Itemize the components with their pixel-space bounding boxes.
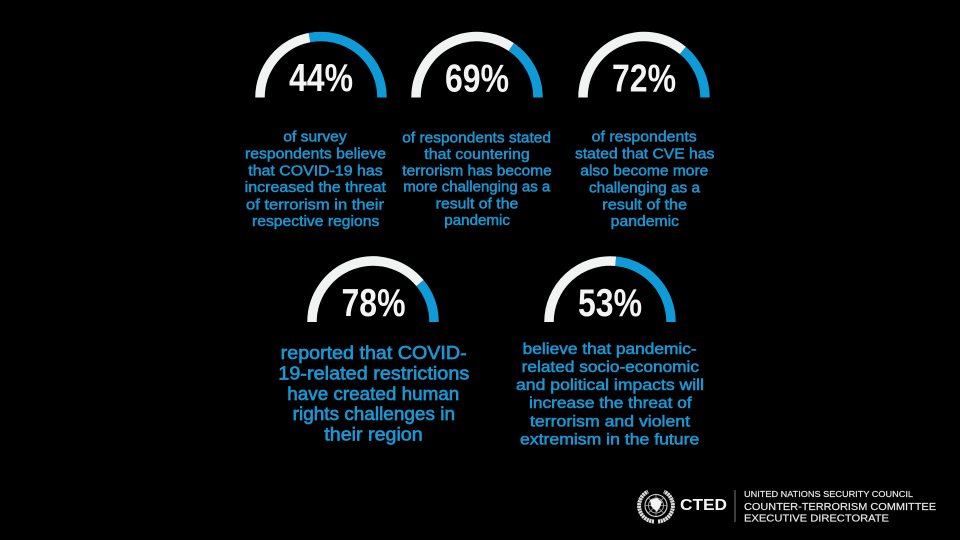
description: 78%: 19-related restrictions <box>278 363 469 383</box>
gauge: 53% <box>549 261 671 322</box>
description: 44%: respective regions <box>252 214 379 230</box>
description: 72%: result of the <box>602 197 687 213</box>
description: 69%: terrorism has become <box>402 163 552 179</box>
value: 53%: 53% <box>578 282 642 325</box>
wordmark: CTED: CTED <box>680 497 727 514</box>
card: 53 percent <box>516 261 704 448</box>
card: 69 percent <box>402 36 552 229</box>
description: 69%: more challenging as a <box>403 180 551 196</box>
description: 53% <box>516 341 704 448</box>
description: 44%: respondents believe <box>245 146 386 162</box>
description: 53%: believe that pandemic- <box>523 341 697 358</box>
description: 72%: pandemic <box>611 214 679 230</box>
description: 78%: their region <box>324 424 423 444</box>
organisation name: COUNTER-TERRORISM COMMITTEE <box>744 502 936 513</box>
card: 78 percent <box>278 261 469 444</box>
value: 78%: 78% <box>342 282 406 325</box>
description: 72%: stated that CVE has <box>575 146 714 162</box>
logo: CTED <box>639 489 936 525</box>
description: 69%: pandemic <box>444 213 510 229</box>
description: 78%: rights challenges in <box>293 404 455 424</box>
description: 69%: that countering <box>424 147 530 163</box>
gauge: 44% <box>260 36 382 98</box>
description: 53%: extremism in the future <box>520 431 699 448</box>
description: 53%: related socio-economic <box>522 359 699 376</box>
value: 44%: 44% <box>289 57 353 100</box>
value: 69%: 69% <box>445 58 509 100</box>
gauge: 72% <box>583 37 705 98</box>
gauge: 69% <box>416 36 538 98</box>
organisation name: EXECUTIVE DIRECTORATE <box>744 514 889 525</box>
description: 44%: of survey <box>283 130 347 146</box>
card: 44 percent <box>245 36 386 230</box>
description: 72% <box>575 130 714 230</box>
description: 72%: also become more <box>580 163 708 179</box>
description: 44%: of terrorism in their <box>246 197 384 213</box>
organisation name <box>744 489 936 525</box>
description: 78% <box>278 343 469 444</box>
description: 72%: of respondents <box>592 130 697 146</box>
description: 69%: of respondents stated <box>402 131 551 147</box>
description: 78%: reported that COVID- <box>281 343 467 363</box>
description: 44%: increased the threat <box>245 180 386 196</box>
description: 53%: and political impacts will <box>516 377 704 394</box>
description: 69%: result of the <box>436 196 518 212</box>
description: 69% <box>402 131 552 229</box>
card: 72 percent <box>575 37 714 230</box>
divider <box>734 490 736 522</box>
value: 72%: 72% <box>612 58 676 100</box>
description: 44%: that COVID-19 has <box>248 163 383 179</box>
description: 53%: terrorism and violent <box>530 413 691 430</box>
description: 72%: challenging as a <box>589 180 701 196</box>
description: 44% <box>245 130 386 230</box>
description: 53%: increase the threat of <box>529 395 692 412</box>
gauge: 78% <box>312 261 434 322</box>
description: 78%: have created human <box>287 384 459 404</box>
organisation name: UNITED NATIONS SECURITY COUNCIL <box>744 489 913 499</box>
icon: UN emblem <box>639 492 673 522</box>
